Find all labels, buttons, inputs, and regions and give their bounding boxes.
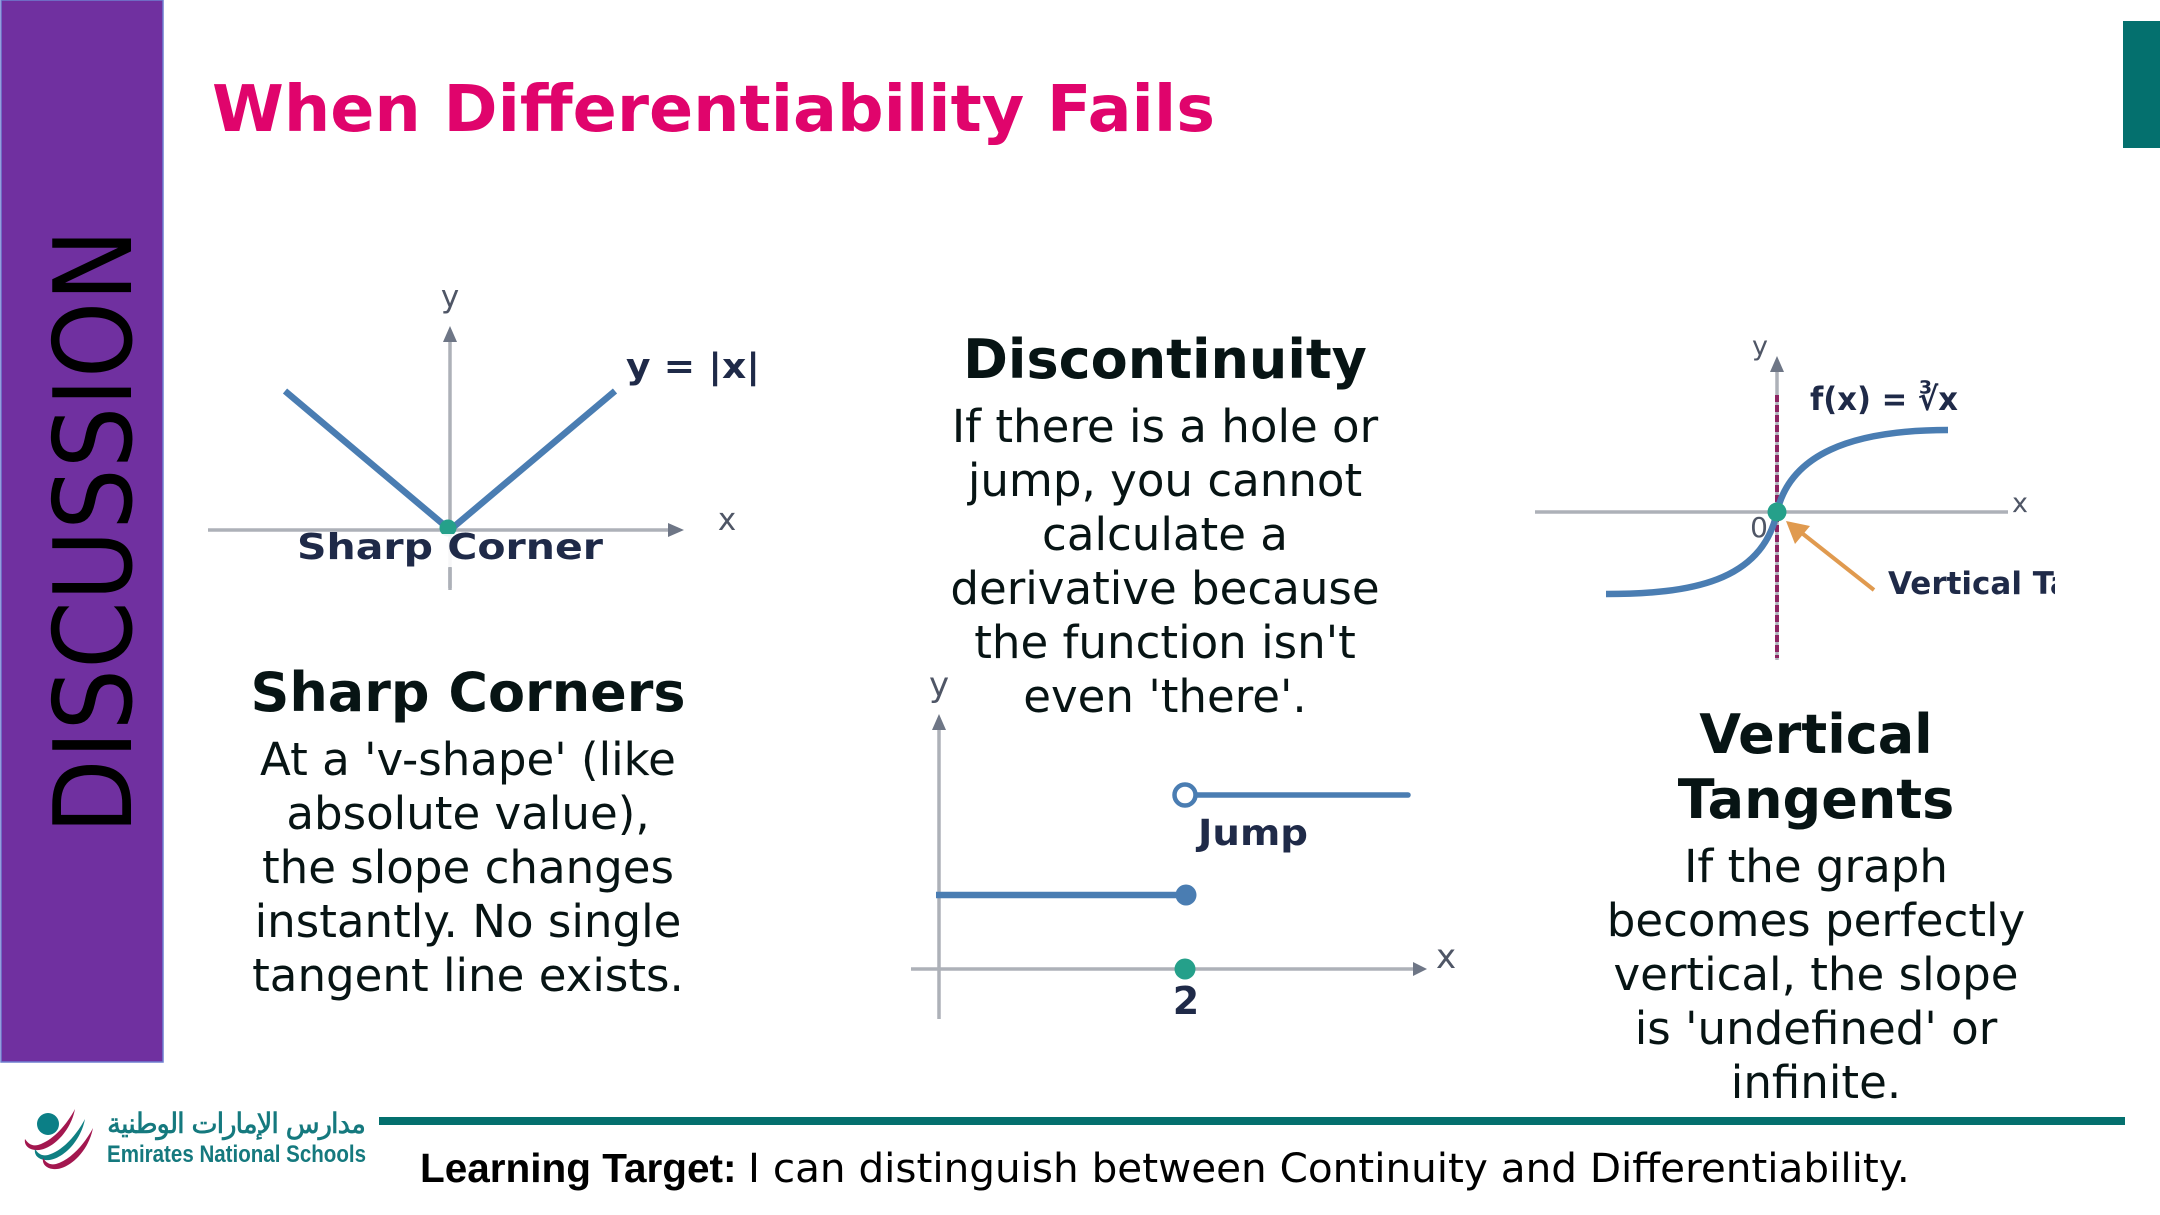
chart: vertical tangent graph	[1535, 340, 2055, 660]
sidebar label: DISCUSSION	[32, 229, 157, 834]
chart: vertical tangent graph: f(x) = ∛x	[1810, 380, 1958, 418]
logo mark	[25, 1109, 93, 1169]
panel: discontinuity text	[950, 328, 1380, 723]
panel: sharp corners text	[250, 661, 686, 1002]
corner tab	[2123, 21, 2160, 148]
chart: vertical tangent graph: y	[1752, 331, 1768, 362]
learning target: I can distinguish between Continuity and Differentiability.	[748, 1144, 1910, 1192]
footer divider	[379, 1117, 2125, 1125]
body: sharp corners: instantly. No single	[255, 895, 681, 948]
panel: vertical tangents text	[1607, 703, 2025, 1109]
body: vertical tangents: infinite.	[1731, 1056, 1901, 1109]
chart: jump discontinuity graph: y	[929, 665, 949, 705]
heading: vertical tangents: Tangents	[1678, 768, 1954, 831]
body: vertical tangents: vertical, the slope	[1613, 948, 2019, 1001]
body: sharp corners: At a 'v-shape' (like	[260, 733, 676, 786]
body: discontinuity: even 'there'.	[1023, 670, 1307, 723]
chart: vertical tangent graph: 0	[1750, 511, 1768, 544]
chart: sharp corner graph: Sharp Corner	[297, 527, 603, 568]
body: sharp corners	[252, 733, 684, 1002]
chart: sharp corner graph: x	[718, 502, 736, 538]
body: vertical tangents	[1607, 840, 2025, 1109]
logo arabic name: مدارس الإمارات الوطنية	[107, 1107, 366, 1140]
body: discontinuity: jump, you cannot	[967, 454, 1362, 507]
body: sharp corners: tangent line exists.	[252, 949, 684, 1002]
body: sharp corners: the slope changes	[262, 841, 674, 894]
body: vertical tangents: If the graph	[1684, 840, 1948, 893]
body: sharp corners: absolute value),	[286, 787, 650, 840]
heading: vertical tangents: Vertical	[1699, 703, 1933, 766]
panel: discussion sidebar	[1, 0, 163, 1062]
heading: discontinuity: Discontinuity	[963, 328, 1367, 391]
chart: sharp corner graph	[208, 279, 760, 590]
body: discontinuity: If there is a hole or	[952, 400, 1379, 453]
heading: sharp corners: Sharp Corners	[250, 661, 686, 724]
chart: jump discontinuity graph: x	[1436, 937, 1456, 977]
body: discontinuity: calculate a	[1042, 508, 1288, 561]
logo english name: Emirates National Schools	[107, 1141, 366, 1168]
chart: sharp corner graph: y = |x|	[626, 347, 760, 387]
chart: jump discontinuity graph: Jump	[1195, 813, 1308, 854]
body: discontinuity: the function isn't	[974, 616, 1356, 669]
title: When Differentiability Fails	[212, 73, 1215, 147]
chart: vertical tangent graph: x	[2012, 488, 2028, 519]
chart: sharp corner graph: y	[441, 279, 459, 315]
body: discontinuity: derivative because	[950, 562, 1380, 615]
chart: jump discontinuity graph	[911, 665, 1456, 1023]
heading: vertical tangents	[1678, 703, 1954, 831]
chart: jump discontinuity graph: 2	[1173, 979, 1199, 1023]
learning target: Learning Target:	[420, 1145, 737, 1191]
logo: Emirates National Schools	[25, 1107, 366, 1169]
body: vertical tangents: becomes perfectly	[1607, 894, 2025, 947]
body: discontinuity	[950, 400, 1380, 723]
body: vertical tangents: is 'undefined' or	[1635, 1002, 1998, 1055]
